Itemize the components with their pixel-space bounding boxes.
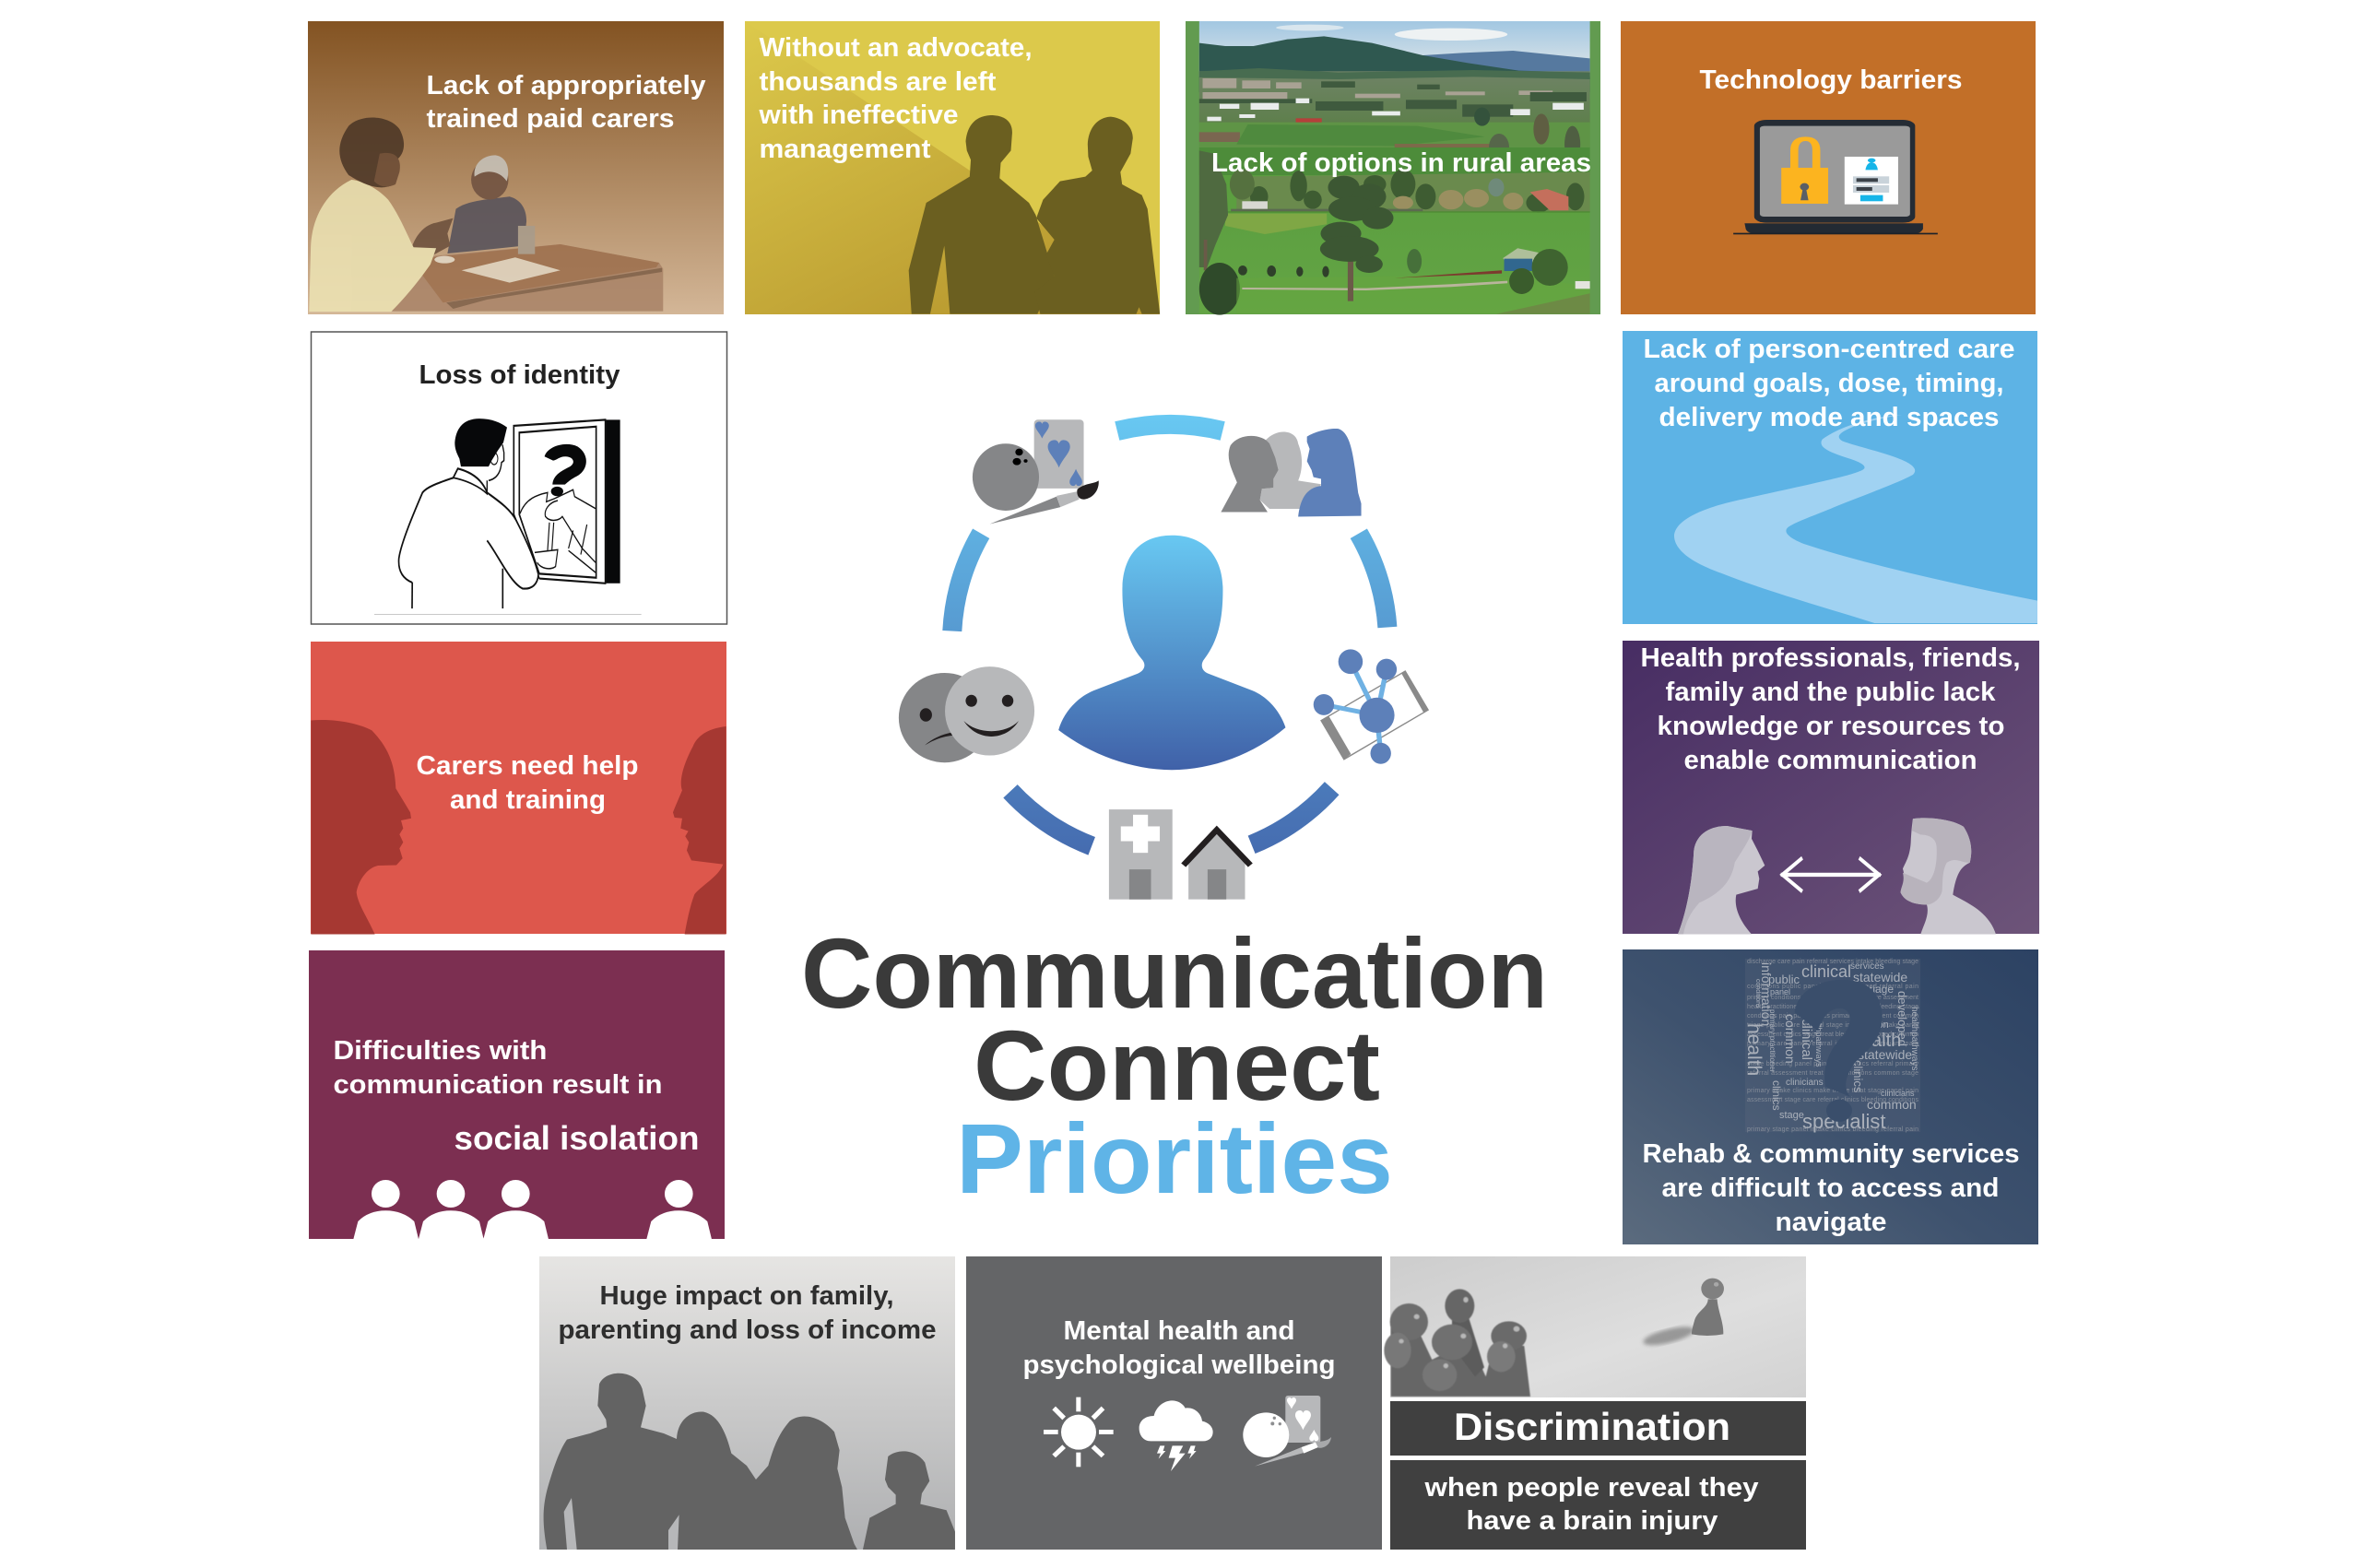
icon: hospital and house xyxy=(1109,809,1250,900)
icon: two facing head silhouettes xyxy=(311,720,726,935)
text: panel caption xyxy=(1023,1316,1335,1380)
icon: three people in profile xyxy=(1221,429,1362,516)
band: caption: have a brain injury xyxy=(1466,1506,1718,1536)
panel: difficulties with communication result in social isolation xyxy=(309,950,725,1239)
icon: word cloud question mark: specialist xyxy=(1802,1110,1885,1133)
panel: rehab and community services difficult to access xyxy=(1623,949,2038,1244)
icon: word cloud question mark: clinical xyxy=(1799,1019,1814,1060)
icon: word cloud question mark: triage public care referral stage information intake panel xyxy=(1747,1022,1918,1029)
central diagram: person surrounded by ring and icons xyxy=(899,419,1428,900)
icon: word cloud question mark: conditions pain panel clinics primary assessment common xyxy=(1747,1013,1918,1020)
icon: word cloud question mark: primary conditions health clinics referral stage assessment xyxy=(1747,995,1918,1001)
text: panel caption: with ineffective xyxy=(758,100,959,130)
icon: two male silhouettes xyxy=(909,115,1160,314)
icon: word cloud question mark: healthpathways xyxy=(1909,1007,1919,1071)
text: panel caption: management xyxy=(760,135,931,164)
icon: word cloud question mark: stage xyxy=(1779,1110,1804,1121)
icon: word cloud question mark: common xyxy=(1867,1097,1917,1112)
icon: word cloud question mark: alth xyxy=(1871,1031,1901,1051)
icon: word cloud question mark: conditions xyxy=(1754,979,1761,1008)
icon: laptop with padlock and login card xyxy=(1733,120,1938,234)
text: panel caption: Carers need help xyxy=(417,751,638,781)
text: panel caption: Mental health and xyxy=(1064,1316,1294,1346)
icon: word cloud question mark: statewide xyxy=(1853,970,1907,984)
panel: lack of person-centred care xyxy=(1623,331,2037,624)
icon: word cloud question mark: panel xyxy=(1770,987,1790,996)
text: panel caption xyxy=(559,1281,937,1345)
icon: word cloud question mark: clinical xyxy=(1801,962,1851,981)
icon: word cloud question mark: triage xyxy=(1866,983,1894,996)
panel: lack of options in rural areas xyxy=(1186,21,1600,315)
text: panel caption: enable communication xyxy=(1683,746,1977,775)
text: panel caption xyxy=(1641,643,2021,775)
band: discrimination heading: Discrimination xyxy=(1454,1405,1730,1448)
icon: word cloud question mark: primary care panel referral information clinicians pain xyxy=(1747,1041,1918,1047)
icon: leisure activities xyxy=(1243,1396,1331,1467)
icon: sad and happy faces xyxy=(899,666,1034,762)
icon: word cloud question mark: conditions public panel triage developed referral pain xyxy=(1747,984,1918,990)
text: panel caption: around goals, dose, timing, xyxy=(1654,369,2004,398)
text: panel caption: Technology barriers xyxy=(1700,65,1962,95)
text: panel caption xyxy=(1643,335,2015,432)
panel: carers need help and training xyxy=(311,642,726,935)
icon: word cloud question mark: health xyxy=(1743,1023,1765,1076)
band: caption xyxy=(1390,1460,1806,1550)
panel: discrimination xyxy=(1384,1256,1806,1550)
icon: word cloud question mark: assessment stage care referral clinics bleeding conditions xyxy=(1747,1097,1919,1103)
icon: phone with network nodes xyxy=(1314,649,1428,764)
text: panel caption: Difficulties with xyxy=(334,1036,548,1066)
photo: lone pawn apart from a group of pawns xyxy=(1384,1256,1806,1397)
icon: central person silhouette xyxy=(1058,536,1285,770)
icon: word cloud question mark: statewide xyxy=(1858,1047,1912,1062)
text: panel caption: Lack of appropriately xyxy=(426,71,706,100)
icon: word cloud question mark: primary stage panel intake clinics bleeding referral pain xyxy=(1747,1126,1918,1133)
text: panel caption xyxy=(1643,1139,2019,1237)
icon: word cloud question mark: referral assessment treat care conditions common stage xyxy=(1747,1070,1918,1077)
icon: word cloud question mark: clinics xyxy=(1770,1080,1783,1111)
icon: word cloud question mark: services xyxy=(1850,961,1884,972)
panel: mental health and psychological wellbeing xyxy=(966,1256,1382,1550)
text: panel caption: Without an advocate, xyxy=(760,33,1033,63)
icon: word cloud question mark: developed xyxy=(1895,991,1909,1046)
text: panel caption: Rehab & community services xyxy=(1643,1139,2019,1169)
text: panel caption: communication result in xyxy=(334,1070,662,1100)
panel: lack of appropriately trained paid carers xyxy=(308,21,724,314)
panel: huge impact on family xyxy=(539,1256,955,1550)
text: panel caption: Lack of person-centred care xyxy=(1643,335,2015,364)
text: panel caption: family and the public lack xyxy=(1665,678,1996,707)
text: panel caption: are difficult to access and xyxy=(1661,1173,1999,1203)
icon: word cloud question mark: ion xyxy=(1875,1020,1889,1031)
text: panel caption: navigate xyxy=(1776,1208,1886,1237)
icon: storm cloud xyxy=(1139,1400,1213,1471)
icon: word cloud question mark: assessment clinics stage treat bleeding developed common xyxy=(1747,1032,1918,1038)
panel: technology barriers xyxy=(1621,21,2036,314)
icon: word cloud question mark: discharge care pain referral services intake bleeding stage xyxy=(1747,959,1918,965)
icon: sun xyxy=(1044,1397,1114,1467)
icon: word cloud question mark: common xyxy=(1783,1014,1798,1064)
text: panel caption xyxy=(334,1036,699,1157)
photo: carer and older man at a table xyxy=(309,118,663,312)
icon: word cloud question mark xyxy=(1743,959,1920,1133)
icon: family silhouette xyxy=(544,1373,955,1550)
icon: leisure activities xyxy=(973,419,1099,524)
icon: word cloud question mark: public xyxy=(1768,973,1800,986)
icon: woman and man facing each other with two-way arrow xyxy=(1678,818,1996,935)
question mark cut-out xyxy=(1795,980,1882,1122)
icon: word cloud question mark: information xyxy=(1759,962,1774,1026)
text: panel caption xyxy=(758,33,1033,164)
title: Communication Connect Priorities: Communication xyxy=(801,917,1548,1029)
panel: loss of identity xyxy=(312,332,726,624)
icon: word cloud question mark: stage bleeding panel pain intake clinics referral primary xyxy=(1747,1061,1919,1067)
panel: without an advocate xyxy=(745,21,1160,314)
icon: word cloud question mark: healthpathways xyxy=(1814,1009,1824,1067)
band: caption: when people reveal they xyxy=(1423,1473,1759,1503)
text: panel caption: Huge impact on family, xyxy=(599,1281,894,1311)
panel: knowledge or resources to enable communication xyxy=(1623,641,2039,935)
band: discrimination heading xyxy=(1390,1401,1806,1456)
text: panel caption xyxy=(426,71,706,134)
title: Communication Connect Priorities: Priorities xyxy=(956,1102,1393,1214)
icon: winding river xyxy=(1674,415,2037,623)
icon: word cloud question mark: primary intake clinics make triage treat stage panel pain xyxy=(1747,1088,1918,1094)
text: panel caption: and training xyxy=(450,785,606,815)
text: panel caption: thousands are left xyxy=(760,67,997,97)
icon: word cloud question mark: clinics xyxy=(1851,1060,1865,1093)
text: panel caption: Health professionals, friends, xyxy=(1641,643,2021,673)
text: panel caption: psychological wellbeing xyxy=(1023,1350,1335,1380)
icon: word cloud question mark: health practitioners primary intake clinicians bleeding stage xyxy=(1747,1004,1918,1010)
text: panel caption: knowledge or resources to xyxy=(1658,712,2004,741)
title: Communication Connect Priorities xyxy=(801,917,1548,1214)
text: panel caption xyxy=(417,751,638,815)
icon: man looking in a mirror with a question mark xyxy=(374,419,642,615)
text: panel caption: parenting and loss of income xyxy=(559,1315,937,1345)
icon: word cloud question mark: clinicians xyxy=(1881,1089,1915,1098)
text: panel caption: delivery mode and spaces xyxy=(1659,403,1999,432)
text: panel caption: Lack of options in rural areas xyxy=(1211,148,1591,178)
ring arcs xyxy=(952,424,1387,846)
icon: group of three people and one apart xyxy=(353,1180,712,1239)
icon: word cloud question mark: clinicians xyxy=(1786,1078,1824,1088)
text: panel caption: social isolation xyxy=(454,1119,699,1157)
icon: word cloud question mark: primary practitioner xyxy=(1768,1009,1777,1073)
photo: rural landscape xyxy=(1199,21,1590,315)
title: Communication Connect Priorities: Connect xyxy=(974,1009,1380,1121)
text: panel caption: Loss of identity xyxy=(419,360,620,390)
text: panel caption: trained paid carers xyxy=(426,104,675,134)
